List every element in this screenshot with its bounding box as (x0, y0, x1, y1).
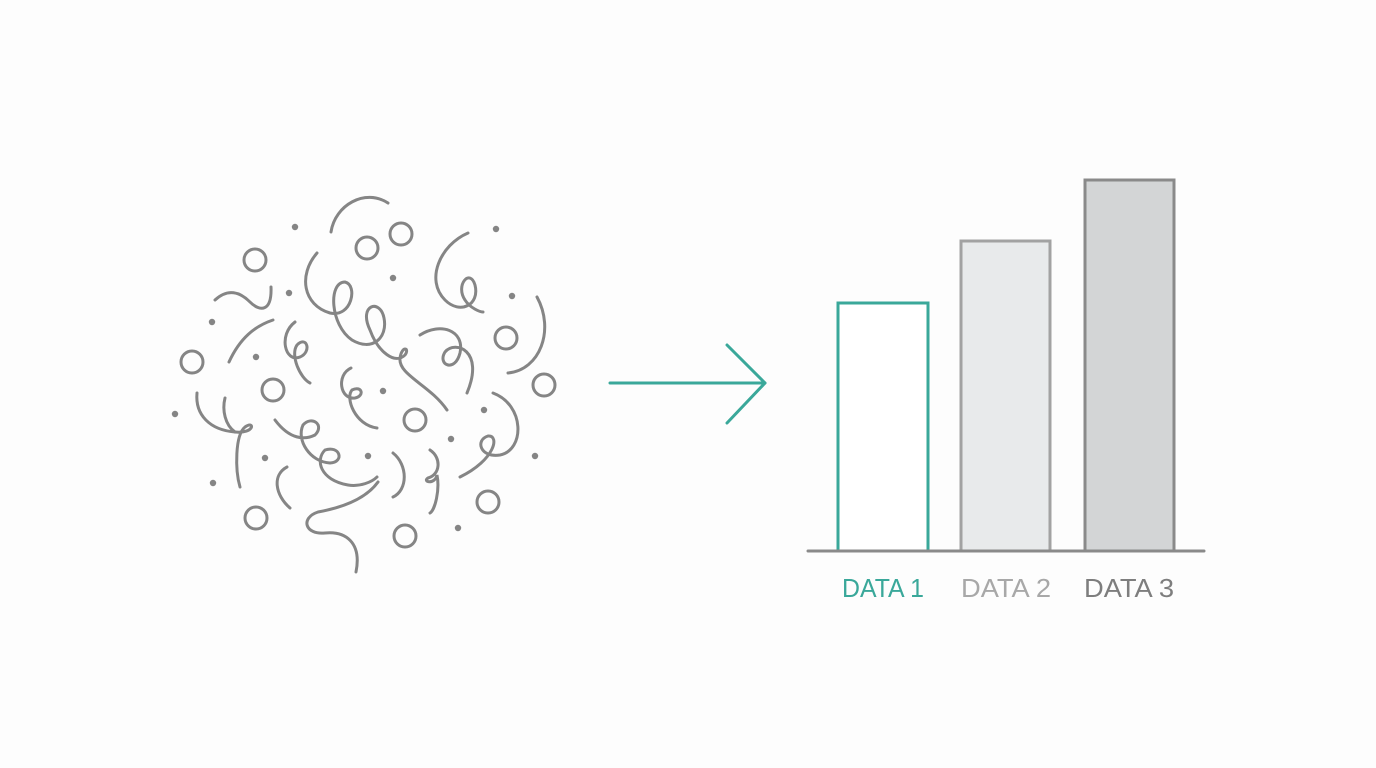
labels: DATA 1 (842, 573, 924, 603)
labels: DATA 3 (1084, 573, 1174, 603)
bar: data 2 (961, 241, 1050, 551)
curls (197, 197, 545, 572)
labels: DATA 2 (961, 573, 1051, 603)
arrow (610, 345, 765, 423)
labels (842, 573, 1174, 603)
circles (181, 223, 555, 547)
scribble cluster: chaotic data (172, 197, 555, 572)
bar chart (808, 180, 1204, 603)
dots (172, 224, 538, 531)
bar: data 1 (838, 303, 928, 551)
bar: data 3 (1085, 180, 1174, 551)
